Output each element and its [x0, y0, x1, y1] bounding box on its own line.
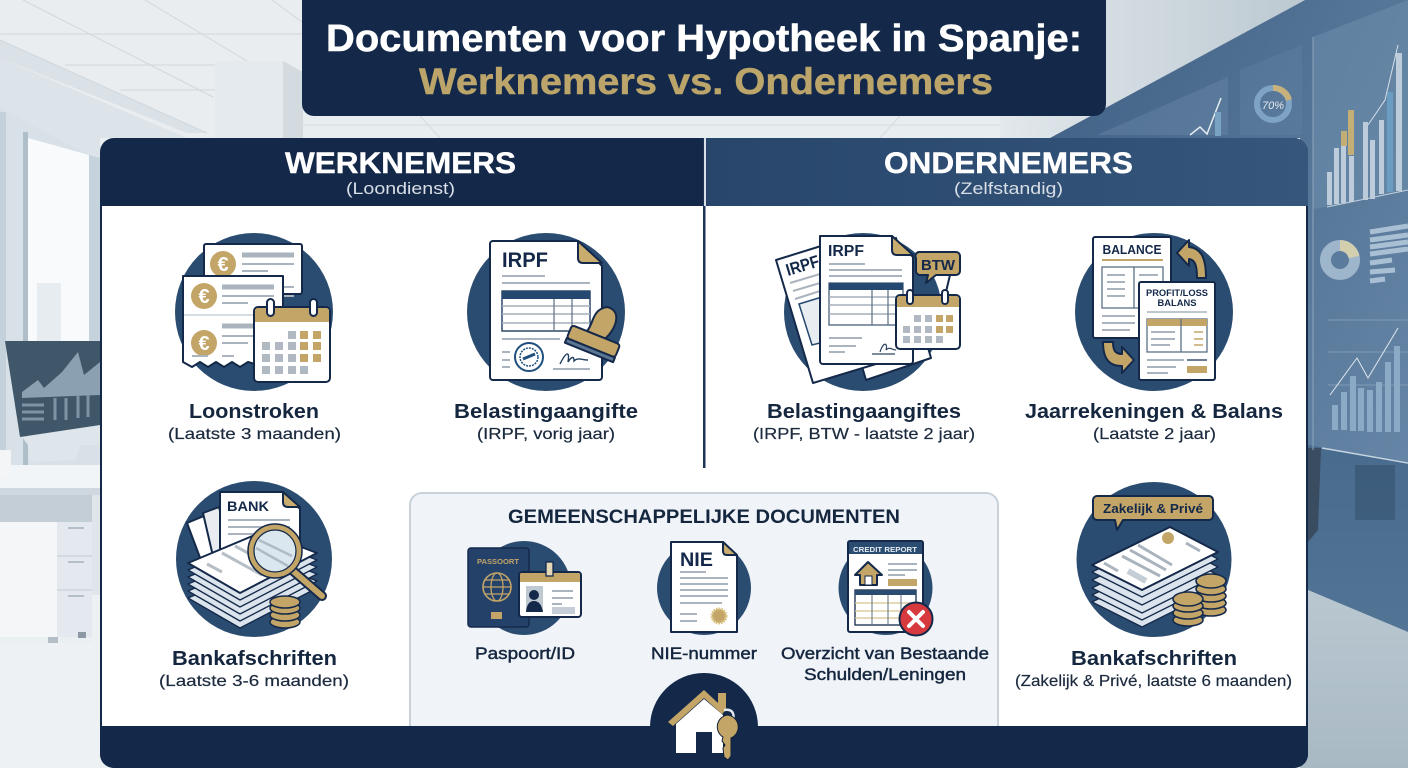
icon: jaarrekeningen en balans: PROFIT/LOSS [1146, 288, 1208, 299]
heading: werknemers: WERKNEMERS [285, 147, 516, 180]
label: loonstroken [168, 401, 341, 443]
label: overzicht schulden: Schulden/Leningen [804, 665, 966, 684]
label: loonstroken: Loonstroken [189, 401, 319, 423]
icon: loonstroken: € [198, 333, 210, 355]
icon: nie document: NIE [680, 550, 713, 571]
label: belastingaangiftes: Belastingaangiftes [767, 401, 961, 423]
heading: ondernemers: ONDERNEMERS [884, 147, 1133, 180]
title banner [302, 0, 1106, 116]
icon: loonstroken: € [217, 254, 229, 276]
heading: gemeenschappelijke documenten: GEMEENSCHAPPELIJKE DOCUMENTEN [508, 507, 900, 528]
icon: belastingaangiftes: IRPF [784, 252, 822, 280]
panel: gemeenschappelijke documenten [410, 493, 998, 726]
icon: bankafschriften werknemers [176, 481, 332, 637]
heading: ondernemers [884, 147, 1133, 198]
icon: loonstroken: € [198, 286, 210, 308]
icon: belastingaangiftes: BTW [921, 257, 956, 274]
title line 2: Werknemers vs. Ondernemers [419, 61, 993, 102]
icon: loonstroken [175, 233, 333, 391]
label: loonstroken: (Laatste 3 maanden) [168, 426, 341, 443]
label: belastingaangiftes: (IRPF, BTW - laatste 2 jaar) [753, 426, 975, 443]
icon: paspoort [468, 541, 581, 635]
heading: werknemers [285, 147, 516, 198]
icon: house with key [650, 673, 758, 760]
label: belastingaangiftes [753, 401, 975, 443]
icon: nie document [657, 541, 751, 635]
label: jaarrekeningen en balans [1025, 401, 1283, 443]
icon: bankafschriften ondernemers: Zakelijk & Privé [1103, 501, 1203, 516]
label: overzicht schulden [781, 644, 989, 684]
label: bankafschriften ondernemers: Bankafschriften [1071, 648, 1237, 670]
bottom bar [100, 726, 1308, 768]
wall charts: 70% [1262, 100, 1284, 112]
icon: belastingaangifte: IRPF [502, 249, 548, 272]
icon: bankafschriften ondernemers [1076, 482, 1232, 637]
label: overzicht schulden: Overzicht van Bestaande [781, 644, 989, 663]
icon: jaarrekeningen en balans: BALANS [1158, 298, 1196, 309]
main panel frame [100, 138, 1308, 768]
icon: belastingaangiftes [776, 233, 960, 391]
icon: belastingaangifte [467, 233, 632, 391]
icon: paspoort: PASSOORT [477, 557, 519, 566]
label: bankafschriften ondernemers [1015, 648, 1292, 690]
icon: jaarrekeningen en balans: BALANCE [1102, 243, 1162, 257]
label: bankafschriften ondernemers: (Zakelijk & Privé, laatste 6 maanden) [1015, 673, 1292, 690]
label: paspoort: Paspoort/ID [475, 644, 575, 663]
label: nie-nummer: NIE-nummer [651, 644, 757, 663]
label: bankafschriften werknemers [159, 648, 349, 690]
icon: belastingaangiftes: IRPF [828, 243, 864, 260]
label: bankafschriften werknemers: Bankafschriften [172, 648, 337, 670]
heading: werknemers: (Loondienst) [346, 179, 455, 198]
wall charts [1097, 0, 1408, 450]
label: belastingaangifte: Belastingaangifte [454, 401, 638, 423]
icon: jaarrekeningen en balans [1075, 233, 1233, 391]
icon: bankafschriften werknemers: BANK [227, 498, 269, 514]
label: belastingaangifte: (IRPF, vorig jaar) [477, 426, 615, 443]
icon: credit report [838, 541, 932, 636]
title line 1: Documenten voor Hypotheek in Spanje: [326, 18, 1082, 60]
label: belastingaangifte [454, 401, 638, 443]
label: jaarrekeningen en balans: Jaarrekeningen & Balans [1025, 401, 1283, 423]
label: bankafschriften werknemers: (Laatste 3-6 maanden) [159, 673, 349, 690]
icon: credit report: CREDIT REPORT [853, 545, 917, 554]
label: jaarrekeningen en balans: (Laatste 2 jaar) [1093, 426, 1216, 443]
heading: ondernemers: (Zelfstandig) [954, 179, 1063, 198]
